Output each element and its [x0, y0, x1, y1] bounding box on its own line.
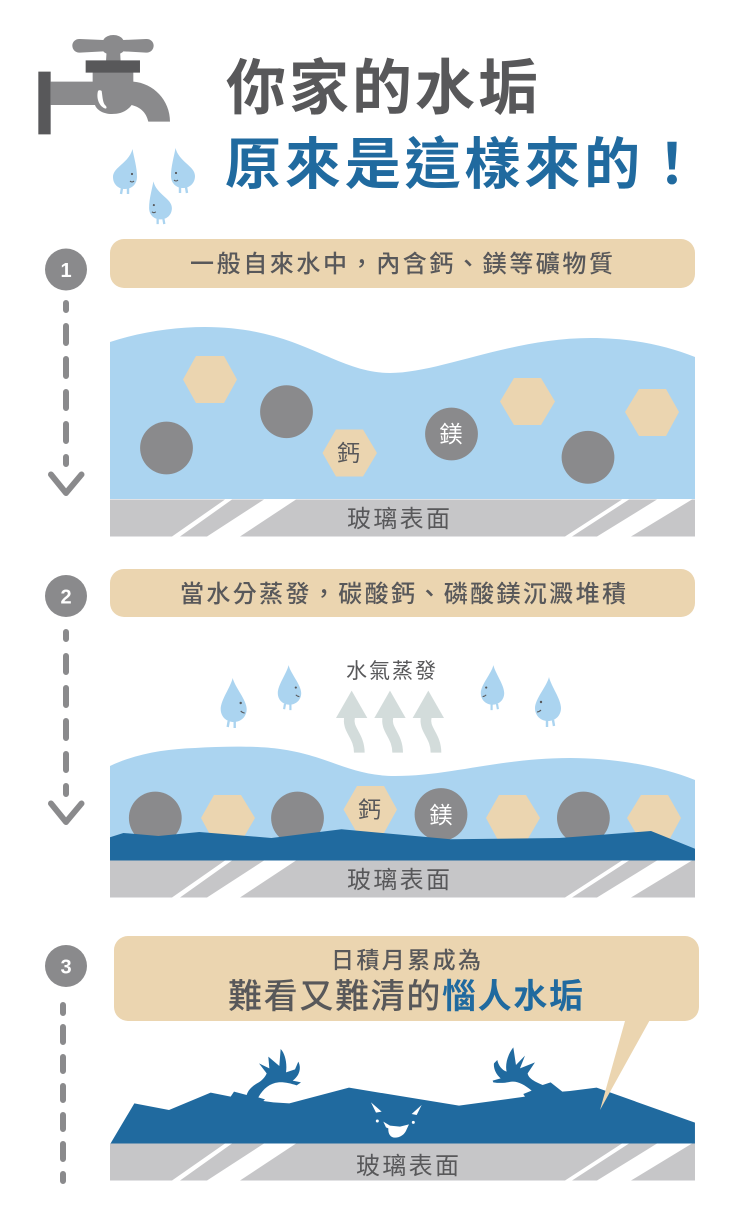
arrows: rising vapor	[336, 691, 444, 753]
panel: limescale monster with claws and face	[111, 1047, 695, 1143]
monster face	[371, 1102, 422, 1138]
arrow: step 1 dashed arrow	[51, 303, 82, 493]
glass surface 2	[110, 860, 695, 898]
step 3 number	[45, 945, 87, 987]
title: 原來是這樣來的！	[225, 133, 700, 196]
speech bubble: step 3	[114, 936, 699, 1110]
scale deposit layer	[110, 829, 695, 860]
heading bar: step 1: 一般自來水中，內含鈣、鎂等礦物質	[190, 251, 613, 278]
dashed line: step 3	[60, 1005, 66, 1181]
arrow: step 2 dashed arrow	[51, 632, 82, 822]
magnesium circle	[425, 408, 478, 460]
magnesium circle	[415, 788, 467, 841]
magnesium circle: 鎂	[430, 802, 452, 828]
heading bar: step 1	[110, 239, 695, 288]
icon: water drops under faucet	[113, 148, 195, 224]
glass surface 2: 玻璃表面	[347, 867, 450, 894]
heading bar: step 2	[110, 569, 695, 617]
calcium hexagon	[322, 430, 377, 476]
speech bubble: step 3: 難看又難清的惱人水垢	[228, 978, 583, 1016]
label: water vapor: 水氣蒸發	[346, 660, 436, 683]
glass surface 1	[110, 500, 695, 536]
panel: tap water minerals	[110, 327, 695, 499]
step 1 number: 1	[60, 260, 72, 282]
calcium hexagon	[344, 786, 397, 833]
step 2 number	[45, 575, 87, 617]
panel: evaporation and deposits	[110, 747, 695, 860]
glass surface 1: 玻璃表面	[347, 506, 450, 533]
step 2 number: 2	[60, 586, 72, 608]
title: 你家的水垢	[226, 55, 538, 122]
icon: faucet	[38, 35, 170, 134]
glass surface 3: 玻璃表面	[356, 1153, 459, 1180]
glass surface 3	[110, 1144, 695, 1180]
calcium hexagon: 鈣	[358, 796, 381, 822]
step 3 number: 3	[60, 956, 72, 978]
calcium hexagon: 鈣	[337, 440, 360, 466]
speech bubble: step 3: 日積月累成為	[331, 947, 481, 973]
title	[225, 55, 700, 196]
magnesium circle: 鎂	[440, 421, 462, 447]
step 1 number	[45, 248, 87, 290]
heading bar: step 2: 當水分蒸發，碳酸鈣、磷酸鎂沉澱堆積	[180, 581, 626, 608]
icon: evaporating drops	[221, 665, 561, 728]
